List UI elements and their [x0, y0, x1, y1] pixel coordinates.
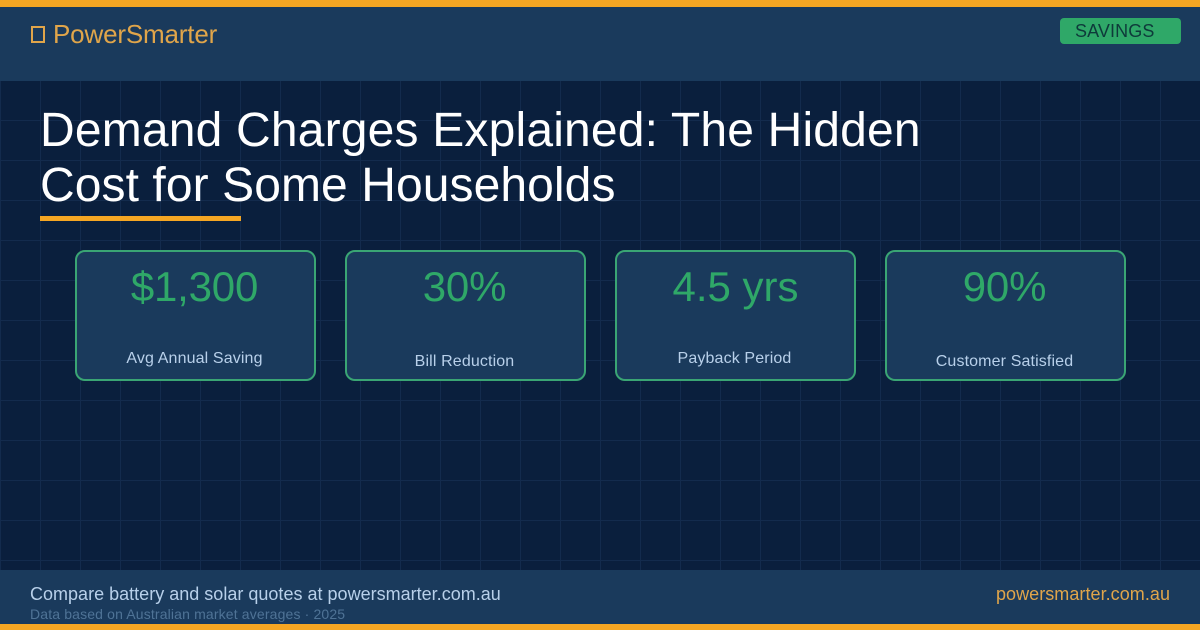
stat card: average annual saving [75, 250, 316, 381]
stat card: payback period [615, 250, 856, 381]
brand name: PowerSmarter [53, 19, 217, 49]
footer bar [0, 570, 1200, 630]
value: 30% [423, 263, 506, 310]
value: 4.5 yrs [672, 263, 799, 310]
bottom accent strip [0, 624, 1200, 630]
value: 90% [963, 263, 1046, 310]
stat card: bill reduction [345, 250, 586, 381]
call to action: Compare battery and solar quotes at powersmarter.com.au [30, 584, 501, 604]
title: Demand Charges Explained: The Hidden [40, 104, 921, 157]
icon: missing glyph box [31, 26, 45, 43]
badge: savings [1060, 18, 1181, 44]
badge: savings: SAVINGS [1075, 21, 1155, 41]
stat card: customer satisfied [885, 250, 1126, 381]
header bar [0, 0, 1200, 81]
value: $1,300 [131, 263, 258, 310]
title: Cost for Some Households [40, 159, 616, 212]
label: Payback Period [678, 350, 791, 367]
logo [31, 19, 217, 49]
title underline [40, 216, 241, 221]
website link: powersmarter.com.au [996, 584, 1170, 604]
data source note: Data based on Australian market averages · 2025 [30, 606, 345, 622]
top accent strip [0, 0, 1200, 7]
label: Avg Annual Saving [126, 350, 263, 367]
title [40, 104, 921, 212]
label: Customer Satisfied [936, 353, 1073, 370]
label: Bill Reduction [415, 353, 514, 370]
